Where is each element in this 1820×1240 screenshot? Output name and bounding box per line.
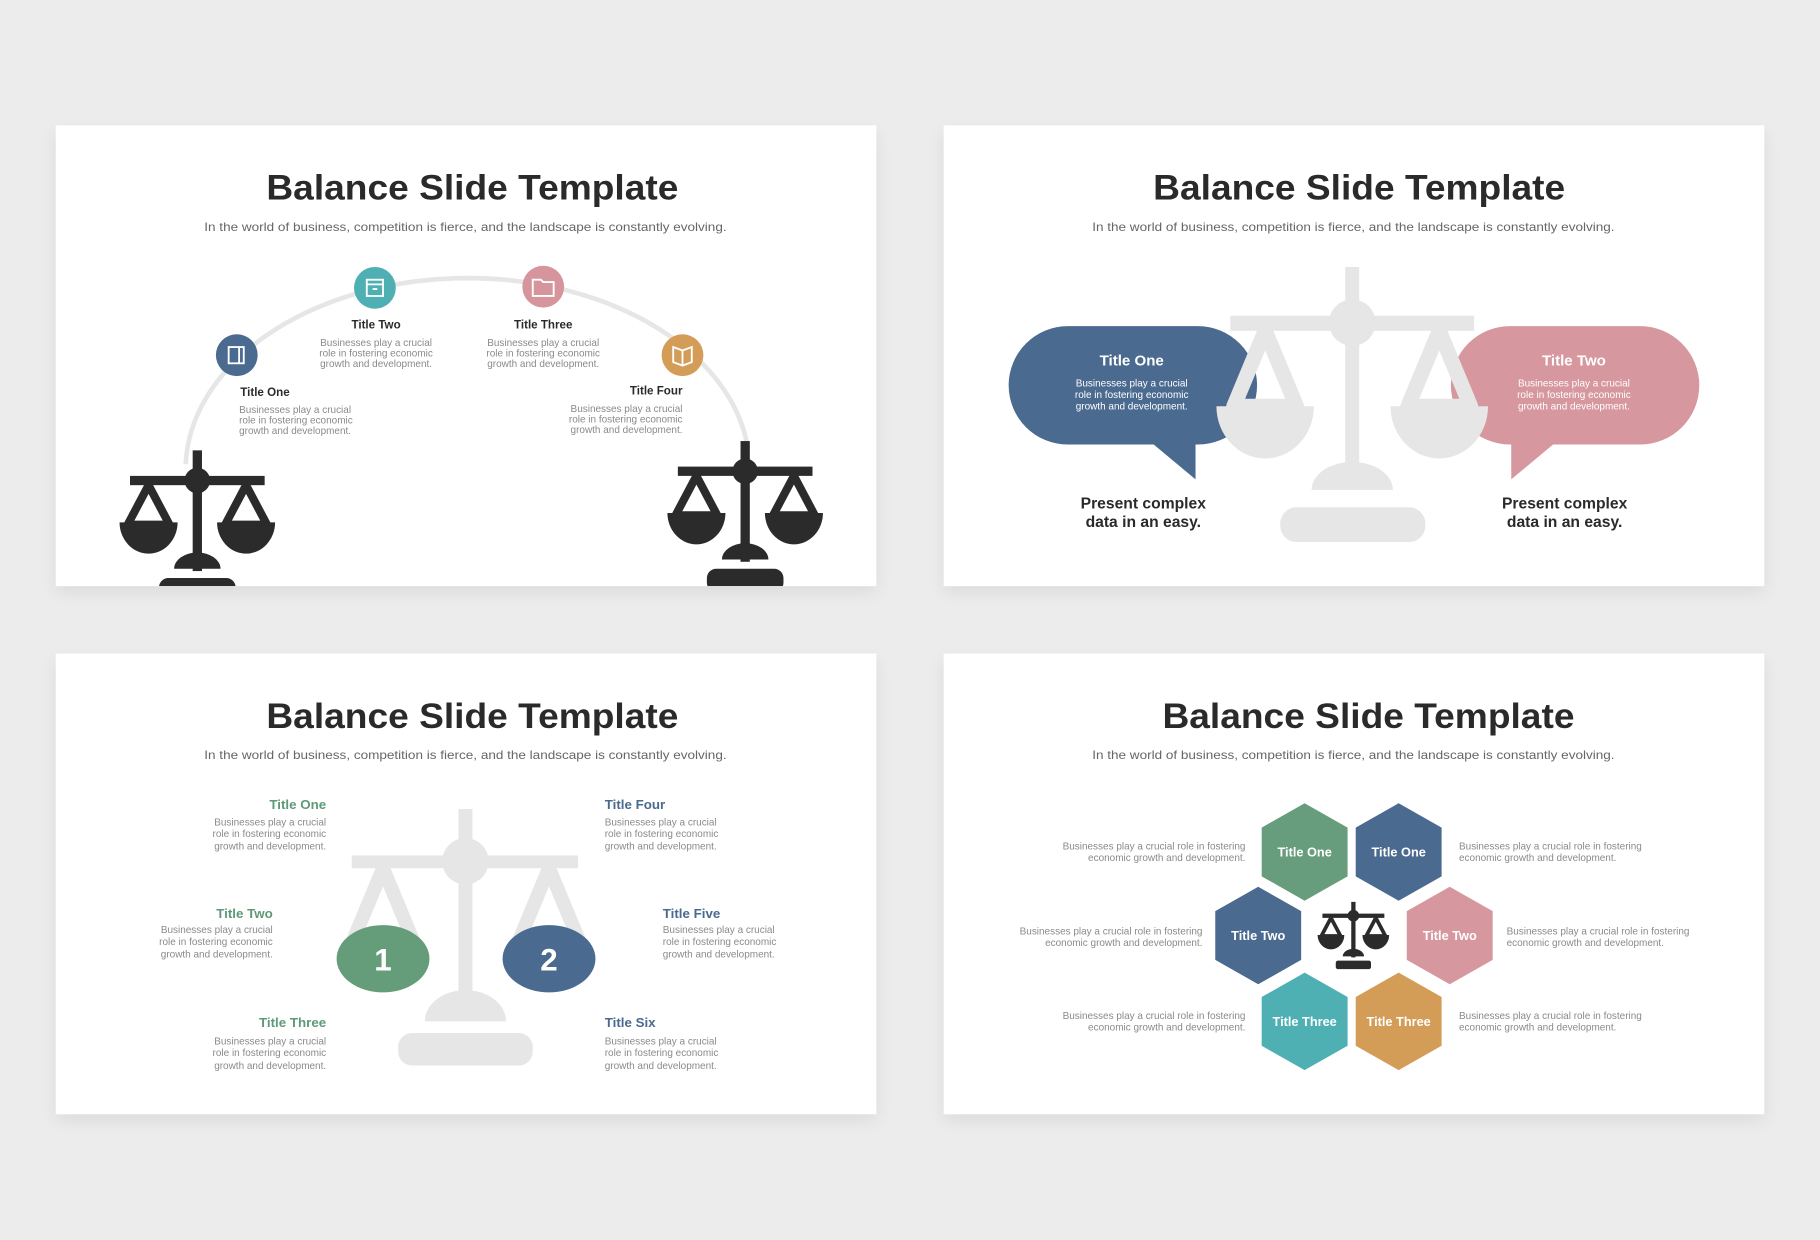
hex: Title Three teal [1262,973,1348,1070]
panel: hexagons [944,653,1764,1114]
pan 2: 2 [540,942,558,977]
text: Title Two: growth and development. [320,359,432,370]
text: right bottom: Businesses play a crucial role in fostering [1459,1011,1642,1022]
subtitle: In the world of business, competition is fierce, and the landscape is constantly evolving. [204,748,727,762]
title: Balance Slide Template [1162,697,1575,736]
text: right caption: Present complex [1502,495,1628,512]
text: Title One: role in fostering economic [239,416,353,427]
panel: numbered scale with six titles [56,653,876,1114]
text: left middle: Businesses play a crucial role in fostering [1020,926,1202,937]
text: right middle [1507,926,1689,949]
text: right caption [1502,495,1628,531]
text: Title One [213,797,326,853]
subtitle: In the world of business, competition is fierce, and the landscape is constantly evolving. [204,220,727,234]
hex: Title One blue: Title One [1371,845,1426,860]
text: Title Three [213,1015,326,1072]
icon: orange book [662,334,703,376]
text: Title Five: role in fostering economic [663,937,776,948]
icon: right scale [667,441,823,592]
hex: Title Three orange: Title Three [1367,1014,1431,1029]
text: left top: economic growth and development. [1088,853,1245,864]
text: Title Five: growth and development. [663,950,775,961]
subtitle: In the world of business, competition is fierce, and the landscape is constantly evolving. [1092,748,1615,762]
text: Title One: role in fostering economic [213,829,326,840]
gray scale [352,809,580,1066]
pan 1: 1 [374,942,392,977]
text: Title One: Businesses play a crucial [214,817,326,828]
icon: center scale [1318,902,1389,969]
hex: Title Three orange [1356,973,1442,1070]
bubble: Title One: Title One [1100,353,1164,370]
arc [186,278,747,464]
text: Title Six: role in fostering economic [605,1048,718,1059]
hex: Title One blue [1356,803,1442,901]
title: Balance Slide Template [266,697,678,736]
text: left middle: economic growth and development. [1045,938,1202,949]
hex: Title Three teal: Title Three [1273,1014,1337,1029]
title: Balance Slide Template [1153,169,1565,208]
text: Title One: Title One [269,797,326,812]
subtitle: In the world of business, competition is fierce, and the landscape is constantly evolving. [1092,220,1615,234]
hex: Title Two blue: Title Two [1231,928,1285,943]
text: Title One: growth and development. [214,842,326,853]
text: Title One [239,386,353,437]
hex: Title One green [1262,803,1348,901]
text: Title Two: growth and development. [161,950,273,961]
text: Title Four: Title Four [605,797,665,812]
text: Title Five: Title Five [663,906,720,921]
text: left top: Businesses play a crucial role in fostering [1063,842,1245,853]
icon: left scale [120,450,275,601]
text: right caption: data in an easy. [1507,514,1622,531]
text: Title Three: Businesses play a crucial [487,338,599,349]
bubble: Title Two: Title Two [1542,353,1606,370]
text: Title Two: role in fostering economic [159,937,273,948]
text: Title One: Title One [240,386,290,399]
text: Title Four: role in fostering economic [569,414,683,425]
icon: teal box [354,267,396,309]
hex: Title Two blue [1215,887,1301,984]
text: left caption [1081,495,1206,531]
bubble: Title One: growth and development. [1076,402,1188,413]
text: Title Two [319,318,433,370]
text: Title One: Businesses play a crucial [239,405,351,416]
text: right top [1459,842,1642,864]
pan 2 [503,925,595,992]
text: Title Three: growth and development. [487,359,599,370]
icon: blue wallet [216,334,258,376]
gray scale [1216,267,1488,542]
text: Title Two: Businesses play a crucial [320,338,432,349]
text: left bottom: economic growth and development. [1088,1023,1245,1034]
text: left bottom: Businesses play a crucial role in fostering [1063,1011,1245,1022]
text: left caption: data in an easy. [1086,514,1201,531]
hex: Title Two pink [1407,887,1493,984]
pan 1 [337,925,429,992]
text: left top [1063,842,1245,864]
text: Title Two: role in fostering economic [319,348,433,359]
hex: Title Two pink: Title Two [1423,928,1477,943]
bubble: Title One: Businesses play a crucial [1076,379,1188,390]
text: right bottom: economic growth and development. [1459,1023,1616,1034]
text: Title Three: role in fostering economic [213,1048,326,1059]
text: Title Four: role in fostering economic [605,829,718,840]
text: left caption: Present complex [1081,495,1206,512]
icon: pink folder [522,266,564,308]
bubble: Title Two: growth and development. [1518,402,1630,413]
text: right top: economic growth and development. [1459,853,1616,864]
bubble: Title Two [1451,326,1699,479]
title: Balance Slide Template [266,169,678,208]
panel: arc with four titles [56,125,876,586]
bubble: Title One: role in fostering economic [1075,390,1189,401]
text: right middle: economic growth and development. [1507,938,1664,949]
text: Title Six: Title Six [605,1015,656,1030]
text: right top: Businesses play a crucial role in fostering [1459,842,1642,853]
text: Title Six: growth and development. [605,1061,717,1072]
text: Title One: growth and development. [239,426,351,437]
text: Title Six: Businesses play a crucial [605,1037,717,1048]
text: left bottom [1063,1011,1245,1034]
text: right bottom [1459,1011,1642,1034]
text: Title Three: Title Three [514,318,573,331]
text: right middle: Businesses play a crucial role in fostering [1507,926,1689,937]
bubble: Title One [1009,326,1257,479]
text: left middle [1020,926,1202,949]
panel: speech bubbles [944,125,1764,586]
text: Title Four: Title Four [630,385,683,398]
text: Title Two: Title Two [351,318,401,331]
text: Title Four [569,385,683,436]
text: Title Five: Businesses play a crucial [663,925,775,936]
text: Title Four [605,797,718,853]
text: Title Three: growth and development. [214,1061,326,1072]
text: Title Four: Businesses play a crucial [571,404,682,415]
text: Title Two: Businesses play a crucial [161,925,273,936]
text: Title Three: Businesses play a crucial [214,1037,326,1048]
text: Title Four: growth and development. [605,842,717,853]
text: Title Two: Title Two [216,906,273,921]
bubble: Title Two: role in fostering economic [1517,390,1631,401]
text: Title Three: role in fostering economic [486,348,600,359]
text: Title Six [605,1015,718,1072]
text: Title Four: Businesses play a crucial [605,817,717,828]
text: Title Four: growth and development. [571,425,682,436]
text: Title Three: Title Three [259,1015,326,1030]
bubble: Title Two: Businesses play a crucial [1518,379,1630,390]
hex: Title One green: Title One [1277,845,1332,860]
text: Title Five [663,906,776,961]
text: Title Three [486,318,600,370]
text: Title Two [159,906,273,961]
